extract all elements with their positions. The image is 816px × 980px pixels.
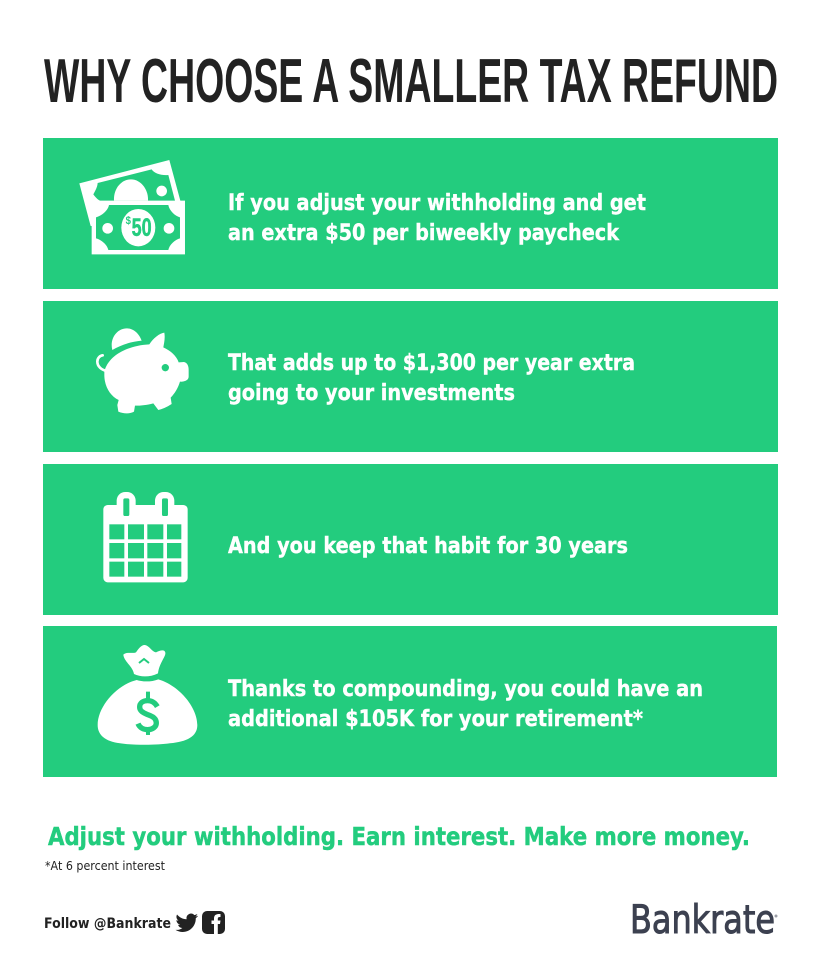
panel text xyxy=(228,351,635,406)
panel: $105K for retirement xyxy=(43,626,777,777)
follow line: Follow @Bankrate xyxy=(44,916,171,932)
panel text: going to your investments xyxy=(228,381,515,406)
icon: money bag xyxy=(98,645,197,745)
panel: extra $50 per paycheck xyxy=(43,138,778,289)
icon: piggy bank xyxy=(97,328,189,413)
panel text xyxy=(228,677,703,732)
panel text xyxy=(228,191,646,246)
panel text: And you keep that habit for 30 years xyxy=(228,534,628,559)
footnote: *At 6 percent interest xyxy=(45,859,165,873)
icon: calendar xyxy=(103,492,188,582)
icon: facebook xyxy=(202,911,225,934)
panel: $1,300 per year xyxy=(43,301,778,452)
panel text: If you adjust your withholding and get xyxy=(228,191,646,216)
panel text: That adds up to $1,300 per year extra xyxy=(228,351,635,376)
icon: banknotes: $ xyxy=(126,215,131,227)
panel text: additional $105K for your retirement* xyxy=(228,707,643,732)
panel: 30 years xyxy=(43,464,778,615)
panel text: Thanks to compounding, you could have an xyxy=(228,677,703,702)
icon: banknotes: 50 xyxy=(132,215,152,242)
icon: banknotes xyxy=(79,160,185,254)
logo: Bankrate: Bankrate xyxy=(630,898,775,943)
panel text: an extra $50 per biweekly paycheck xyxy=(228,221,620,246)
icon: twitter xyxy=(176,914,198,932)
